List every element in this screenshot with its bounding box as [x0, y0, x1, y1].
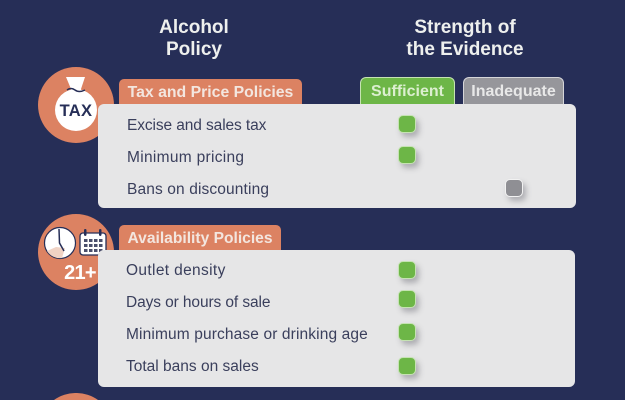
icon: clock calendar and 21+: 21+ [64, 262, 96, 284]
tab: inadequate: Inadequate [471, 83, 556, 100]
marker: bans on discounting inadequate [505, 179, 523, 197]
row label: minimum purchase or drinking age: Minimum purchase or drinking age [126, 326, 368, 343]
marker: minimum pricing sufficient [398, 146, 416, 164]
marker: days or hours sufficient [398, 290, 416, 308]
tab: inadequate [464, 78, 563, 104]
icon: tax money bag: TAX [60, 102, 92, 120]
row label: minimum pricing: Minimum pricing [127, 149, 244, 166]
row label: excise and sales tax: Excise and sales tax [127, 117, 266, 134]
row label: total bans on sales: Total bans on sales [126, 358, 259, 375]
tab: availability policies: Availability Policies [127, 230, 273, 247]
heading: strength of the evidence: Strength of [414, 17, 516, 38]
panel: tax and price policies [98, 104, 576, 208]
heading: alcohol policy: Policy [166, 39, 222, 60]
row label: bans on discounting: Bans on discounting [127, 181, 269, 198]
marker: outlet density sufficient [398, 261, 416, 279]
tab: availability policies [119, 225, 281, 251]
heading: strength of the evidence: the Evidence [406, 39, 524, 60]
icon: next section circle, top edge only [54, 393, 98, 400]
panel: availability policies [98, 250, 575, 387]
icon: tax money bag [38, 67, 114, 143]
tab: sufficient [361, 78, 454, 104]
marker: total bans sufficient [398, 357, 416, 375]
icon: clock calendar and 21+ [38, 214, 114, 290]
row label: days or hours of sale: Days or hours of sale [126, 294, 270, 311]
marker: excise sufficient [398, 115, 416, 133]
tab: tax and price policies [119, 79, 302, 105]
row label: outlet density: Outlet density [126, 262, 226, 279]
tab: tax and price policies: Tax and Price Policies [128, 84, 293, 101]
heading: alcohol policy: Alcohol [159, 17, 229, 38]
heading: strength of the evidence [406, 17, 524, 60]
heading: alcohol policy [159, 17, 229, 60]
marker: minimum purchase sufficient [398, 323, 416, 341]
tab: sufficient: Sufficient [371, 83, 444, 100]
